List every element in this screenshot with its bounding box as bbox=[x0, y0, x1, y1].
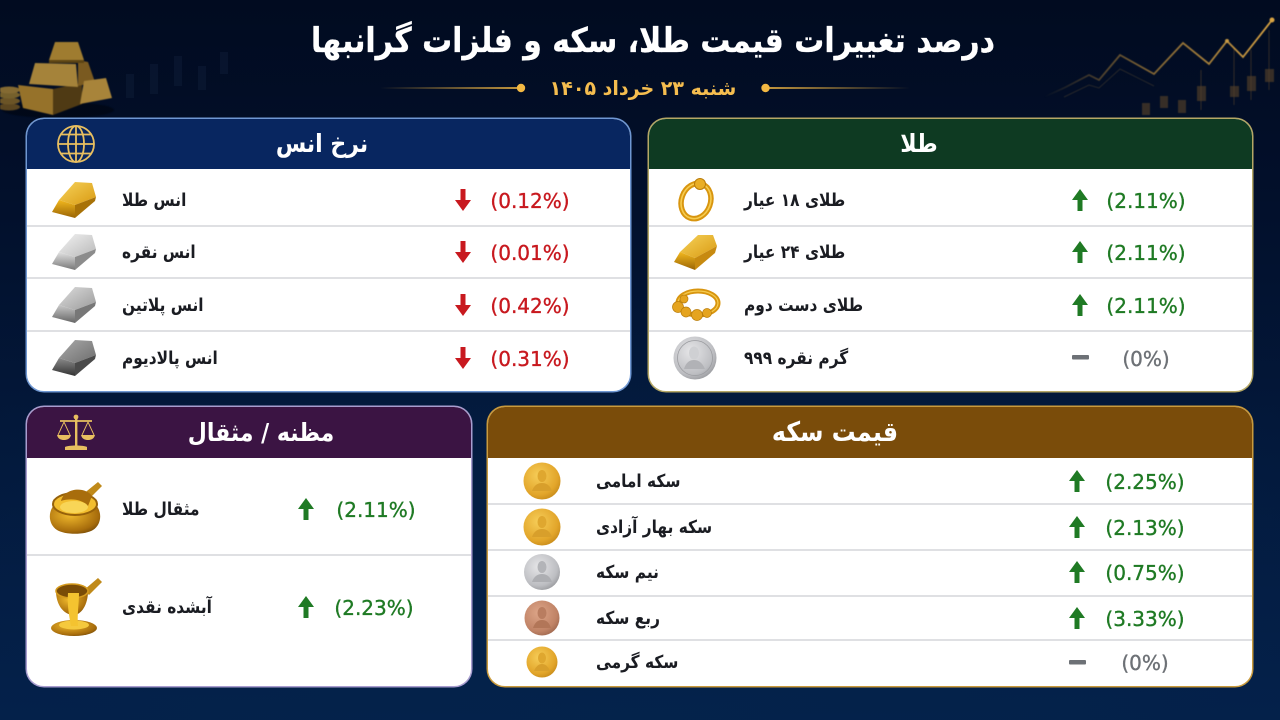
label: سکه امامی bbox=[596, 471, 680, 492]
value: (0.42%) bbox=[490, 294, 570, 318]
value: (2.11%) bbox=[1106, 294, 1186, 318]
icon: pouring molten gold bbox=[51, 578, 102, 636]
ornament: left line bbox=[384, 84, 526, 92]
arrow: up bbox=[1068, 515, 1086, 539]
label: سکه بهار آزادی bbox=[596, 517, 712, 538]
heading: coins: قیمت سکه bbox=[772, 417, 898, 448]
label: طلای ۲۴ عیار bbox=[744, 242, 845, 263]
label: ربع سکه bbox=[596, 608, 660, 629]
value: (0%) bbox=[1121, 651, 1169, 675]
chart: faint candlesticks left bbox=[126, 52, 228, 98]
heading: ounce: نرخ انس bbox=[276, 129, 368, 158]
header: gold bbox=[649, 119, 1252, 169]
panel: coins bbox=[488, 407, 1252, 686]
label: طلای دست دوم bbox=[744, 295, 863, 316]
ornament: right line bbox=[761, 84, 905, 92]
row: platinum ounce bbox=[52, 287, 570, 323]
panel: mesghal bbox=[27, 407, 471, 686]
icon: gold coin bbox=[522, 507, 562, 547]
arrow: down bbox=[455, 294, 471, 316]
icon: silver coin bbox=[522, 552, 562, 592]
arrow: up bbox=[298, 596, 314, 618]
row: palladium ounce bbox=[52, 340, 570, 376]
row: gold mesghal bbox=[50, 482, 416, 534]
icon: platinum bar bbox=[52, 287, 96, 323]
icon: palladium bar bbox=[52, 340, 96, 376]
icon: gold bar bbox=[674, 235, 717, 270]
header: mesghal bbox=[27, 407, 471, 458]
value: (2.11%) bbox=[1106, 189, 1186, 213]
row: half coin bbox=[488, 550, 1252, 594]
date: شنبه ۲۳ خرداد ۱۴۰۵ bbox=[550, 76, 736, 100]
value: (2.13%) bbox=[1105, 516, 1185, 540]
chart: rising gold line and candlesticks bbox=[1051, 16, 1276, 116]
label: نیم سکه bbox=[596, 562, 659, 583]
row: gram coin bbox=[488, 640, 1252, 684]
value: (0.01%) bbox=[490, 241, 570, 265]
value: (0.12%) bbox=[490, 189, 570, 213]
icon: gold ring bbox=[678, 178, 714, 222]
value: (2.23%) bbox=[334, 596, 414, 620]
label: گرم نقره ۹۹۹ bbox=[744, 348, 848, 369]
icon: gold jewellery bbox=[672, 288, 720, 321]
arrow: down bbox=[455, 241, 471, 263]
icon: silver bar bbox=[52, 234, 96, 270]
arrow: up bbox=[1072, 189, 1088, 211]
heading: mesghal: مظنه / مثقال bbox=[188, 418, 334, 447]
value: (2.11%) bbox=[336, 498, 416, 522]
label: سکه گرمی bbox=[596, 652, 678, 673]
date subtitle with ornaments bbox=[384, 76, 905, 100]
panel: gold bbox=[649, 119, 1252, 391]
header: coins bbox=[488, 407, 1252, 458]
row: 18 karat gold bbox=[678, 178, 1186, 222]
row: molten gold bbox=[51, 578, 414, 636]
row: gold ounce bbox=[52, 182, 570, 218]
arrow: up bbox=[1072, 294, 1088, 316]
arrow: up bbox=[1068, 560, 1086, 584]
arrow: down bbox=[455, 347, 471, 369]
icon: gold coin bbox=[524, 462, 560, 500]
label: انس پلاتین bbox=[122, 295, 204, 316]
arrow: up bbox=[1068, 469, 1086, 493]
row: second-hand gold bbox=[672, 288, 1186, 321]
label: انس نقره bbox=[122, 242, 196, 263]
header: ounce bbox=[27, 119, 630, 169]
icon: silver coin bbox=[674, 336, 716, 380]
arrow: up bbox=[1068, 606, 1086, 630]
icon: neutral dash bbox=[1069, 660, 1086, 665]
label: مثقال طلا bbox=[122, 499, 200, 520]
row: Emami coin bbox=[524, 462, 1185, 500]
icon: globe bbox=[57, 125, 95, 163]
icon: copper coin bbox=[522, 598, 562, 638]
label: آبشده نقدی bbox=[122, 597, 212, 618]
value: (0.31%) bbox=[490, 347, 570, 371]
icon: scales bbox=[57, 414, 95, 450]
row: silver gram bbox=[674, 336, 1170, 380]
value: (3.33%) bbox=[1105, 607, 1185, 631]
label: انس طلا bbox=[122, 190, 186, 211]
value: (2.11%) bbox=[1106, 241, 1186, 265]
icon: stacked gold bars bbox=[0, 41, 114, 118]
icon: gold bar bbox=[52, 182, 96, 218]
panel: ounce rates bbox=[27, 119, 630, 391]
arrow: up bbox=[1072, 241, 1088, 263]
row: silver ounce bbox=[52, 234, 570, 270]
icon: neutral dash bbox=[1072, 355, 1089, 360]
icon: gold pot bbox=[50, 482, 102, 534]
row: quarter coin bbox=[488, 596, 1252, 640]
value: (0.75%) bbox=[1105, 561, 1185, 585]
title: درصد تغییرات قیمت طلا، سکه و فلزات گرانبها bbox=[311, 21, 995, 61]
value: (2.25%) bbox=[1105, 470, 1185, 494]
label: انس پالادیوم bbox=[122, 348, 218, 369]
heading: gold: طلا bbox=[900, 129, 938, 158]
arrow: down bbox=[455, 189, 471, 211]
row: Bahar Azadi coin bbox=[488, 505, 1252, 549]
label: طلای ۱۸ عیار bbox=[744, 190, 845, 211]
arrow: up bbox=[298, 498, 314, 520]
icon: small gold coin bbox=[522, 642, 562, 682]
value: (0%) bbox=[1122, 347, 1170, 371]
row: 24 karat gold bbox=[674, 235, 1186, 270]
